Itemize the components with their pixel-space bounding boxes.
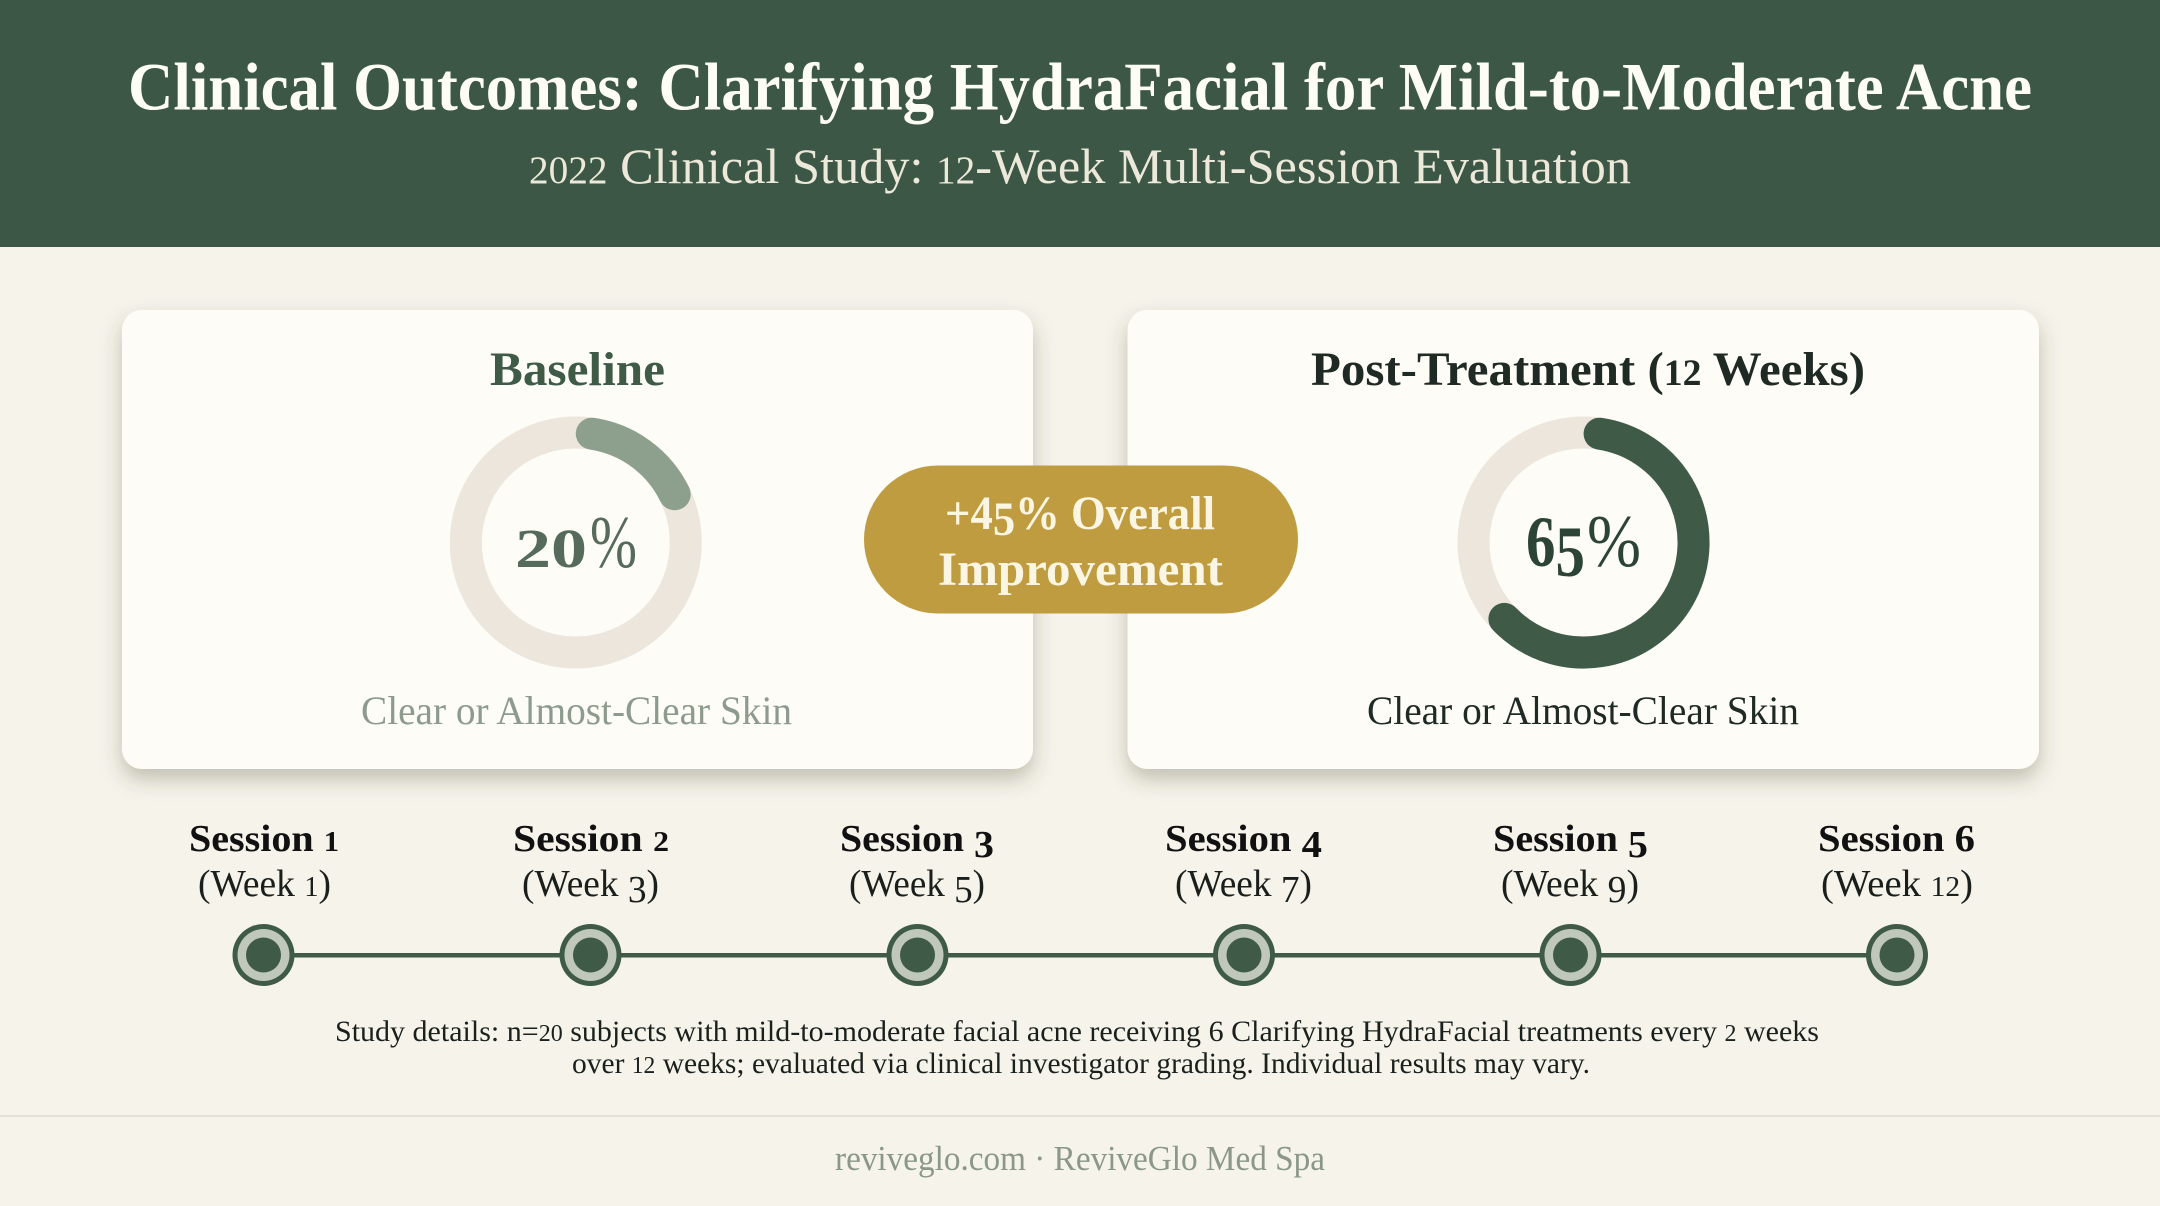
donut chart: 65%: % — [1587, 501, 1641, 583]
session 5: ) — [1626, 863, 1639, 905]
donut chart: 20% — [466, 432, 686, 652]
session 6: Session 6 — [1818, 818, 1975, 860]
title: Clinical Outcomes: Clarifying HydraFacial for Mild-to-Moderate Acne — [128, 48, 2032, 124]
session 5: Session — [1493, 818, 1611, 860]
session 1: Session 1 — [189, 818, 339, 860]
session 4: 4 — [1302, 824, 1322, 866]
donut chart: 65%: 5 — [1556, 512, 1585, 592]
donut chart: 20%: % — [590, 502, 637, 584]
heading: baseline: Baseline — [490, 343, 665, 396]
session 1: (Week 1) — [198, 863, 331, 905]
study details note: Study details: n=20 subjects with mild-to-moderate facial acne receiving 6 Clarifying HydraFacial treatments every 2 weeks — [335, 1015, 1819, 1048]
session 4 — [1165, 818, 1322, 986]
session 5: (Week — [1501, 863, 1599, 905]
session 2: Session 2 — [513, 818, 669, 860]
callout: improvement pill — [864, 466, 1298, 614]
session 4: Session — [1165, 818, 1283, 860]
callout: improvement pill: Overall — [1072, 487, 1226, 540]
session 2: (Week — [522, 863, 620, 905]
subtitle: 2022 Clinical Study: 12-Week Multi-Session Evaluation — [529, 138, 1631, 194]
donut chart: 65% — [1474, 432, 1694, 653]
header banner — [0, 0, 2160, 247]
session 2: 3 — [628, 869, 647, 911]
heading: post-treatment: Post-Treatment (12 Weeks) — [1311, 343, 1865, 396]
session 5: 9 — [1608, 869, 1626, 911]
callout: improvement pill: +4 — [945, 487, 996, 540]
donut chart: 65%: 6 — [1526, 502, 1562, 582]
session 3: Session — [840, 818, 958, 860]
callout: improvement pill: Improvement — [938, 543, 1223, 596]
session 4: ) — [1300, 863, 1312, 905]
session 5: 5 — [1628, 824, 1648, 866]
session 6 — [1818, 818, 1975, 986]
study details note: over 12 weeks; evaluated via clinical investigator grading. Individual results may vary. — [572, 1047, 1590, 1080]
caption: post-treatment: Clear or Almost-Clear Skin — [1367, 688, 1799, 733]
session 3 — [840, 818, 994, 986]
donut chart: 20%: 20 — [515, 518, 587, 579]
session 2 — [513, 818, 669, 986]
session timeline — [189, 818, 1975, 986]
session 3: ) — [973, 863, 985, 905]
callout: improvement pill: 5 — [993, 493, 1015, 546]
caption: baseline: Clear or Almost-Clear Skin — [361, 688, 792, 733]
session 4: (Week — [1175, 863, 1273, 905]
session 3: 5 — [954, 869, 973, 911]
footer: reviveglo.com · ReviveGlo Med Spa — [835, 1139, 1325, 1178]
session 5 — [1493, 818, 1648, 986]
session 6: (Week 12) — [1821, 863, 1973, 905]
session 4: 7 — [1281, 869, 1300, 911]
session 2: ) — [647, 863, 659, 905]
session 3: 3 — [974, 824, 994, 866]
session 1 — [189, 818, 339, 986]
panel: post-treatment — [1128, 310, 2039, 769]
callout: improvement pill: % — [1015, 487, 1060, 540]
panel: baseline — [122, 310, 1033, 769]
session 3: (Week — [849, 863, 947, 905]
study details note — [335, 1015, 1819, 1080]
